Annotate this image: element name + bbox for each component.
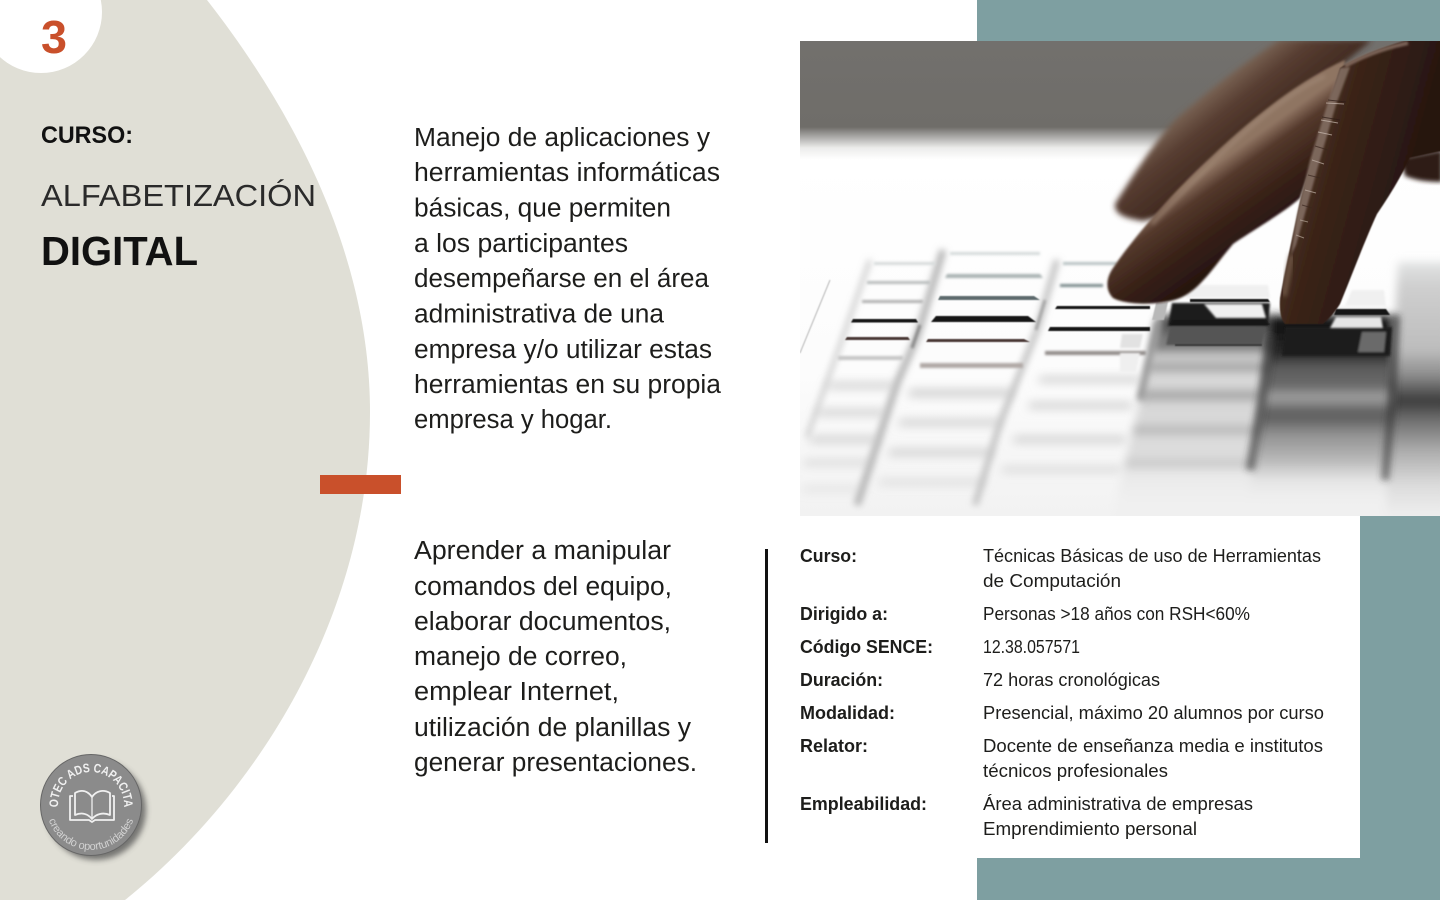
row: curso: Curso: [800, 546, 857, 566]
row: curso: Técnicas Básicas de uso de Herramientas [983, 546, 1321, 566]
paragraph: learning outcomes: utilización de planillas y [414, 714, 691, 742]
front finger skin texture [1284, 43, 1408, 296]
badge shadow [46, 760, 146, 860]
photo background [800, 41, 1440, 516]
row: dirigido a [800, 604, 1250, 624]
icon: open book [70, 791, 114, 822]
badge bottom text: creando oportunidades [50, 818, 133, 852]
course details table [800, 546, 1324, 839]
middle finger highlight [1152, 76, 1325, 224]
paragraph: learning outcomes: emplear Internet, [414, 678, 619, 706]
title line: digital: DIGITAL [41, 228, 198, 274]
keyboard rows, soft foreground [800, 377, 1140, 491]
logo badge: OTEC ADS Capacita [40, 754, 150, 864]
paragraph: course description: a los participantes [414, 230, 628, 258]
hidden finger at the right edge [1400, 150, 1440, 182]
paragraph: course description: administrativa de una [414, 300, 665, 328]
row: duración: Duración: [800, 670, 883, 690]
paragraph: course description: empresa y/o utilizar estas [414, 336, 712, 364]
paragraph: course description: empresa y hogar. [414, 406, 612, 434]
paragraph: learning outcomes: Aprender a manipular [414, 537, 672, 565]
row: relator: técnicos profesionales [983, 761, 1168, 781]
paragraph: learning outcomes: elaborar documentos, [414, 608, 671, 636]
course title [41, 122, 316, 274]
dark gaps between shaded keys [1140, 315, 1396, 480]
row: relator: Relator: [800, 736, 868, 756]
beige side panel [0, 0, 370, 900]
paragraph: learning outcomes: generar presentaciones. [414, 749, 697, 777]
laptop edge [800, 280, 830, 353]
middle finger [1107, 60, 1345, 304]
label: curso: CURSO: [41, 122, 133, 149]
white circle [0, 0, 102, 73]
front finger [1280, 40, 1440, 324]
photo: hand typing on a keyboard [800, 40, 1440, 525]
row: empleabilidad [800, 794, 1253, 839]
paragraph: course description: herramientas en su propia [414, 371, 722, 399]
paragraph: learning outcomes: comandos del equipo, [414, 573, 672, 601]
row: código sence: 12.38.057571 [983, 637, 1080, 657]
row: modalidad: Modalidad: [800, 703, 895, 723]
lit key tops near the fingers [1120, 285, 1386, 372]
badge disc [40, 754, 142, 856]
row: modalidad: Presencial, máximo 20 alumnos por curso [983, 703, 1324, 723]
row: empleabilidad: Área administrativa de empresas [983, 794, 1253, 814]
vertical divider [765, 549, 768, 843]
shaded keys under the hand [1110, 262, 1440, 525]
row: curso: de Computación [983, 571, 1121, 591]
row: modalidad [800, 703, 1324, 723]
paragraph: learning outcomes [414, 537, 697, 777]
keyboard key edges [845, 296, 1390, 346]
paragraph: course description [414, 124, 722, 434]
paragraph: course description: básicas, que permiten [414, 194, 671, 222]
paragraph: course description: Manejo de aplicaciones y [414, 124, 710, 152]
keyboard column gaps [807, 250, 1057, 505]
paragraph: course description: herramientas informáticas [414, 159, 720, 187]
row: código sence: Código SENCE: [800, 637, 933, 657]
number 3: 3 [41, 11, 67, 63]
dark key tops under the fingers [1166, 303, 1392, 356]
teal frame: top band [977, 0, 1440, 42]
row: relator: Docente de enseñanza media e institutos [983, 736, 1323, 756]
badge top text: OTEC ADS CAPACITA [49, 764, 133, 808]
row: relator [800, 736, 1323, 781]
row: curso [800, 546, 1321, 591]
row: dirigido a: Dirigido a: [800, 604, 888, 624]
keyboard rows, mid-focus [838, 252, 1146, 368]
paragraph: course description: desempeñarse en el área [414, 265, 710, 293]
number badge [0, 0, 102, 73]
back finger [1115, 40, 1372, 221]
paragraph: learning outcomes: manejo de correo, [414, 643, 627, 671]
row: duración: 72 horas cronológicas [983, 670, 1160, 690]
key highlight at the gap [1152, 302, 1168, 320]
row: código sence [800, 637, 1080, 657]
teal frame: right and bottom band [977, 516, 1440, 900]
row: empleabilidad: Empleabilidad: [800, 794, 927, 814]
row: duración [800, 670, 1160, 690]
row: empleabilidad: Emprendimiento personal [983, 819, 1197, 839]
row: dirigido a: Personas >18 años con RSH<60% [983, 604, 1250, 624]
title line: alfabetización: ALFABETIZACIÓN [41, 178, 316, 213]
orange accent bar [320, 475, 401, 494]
